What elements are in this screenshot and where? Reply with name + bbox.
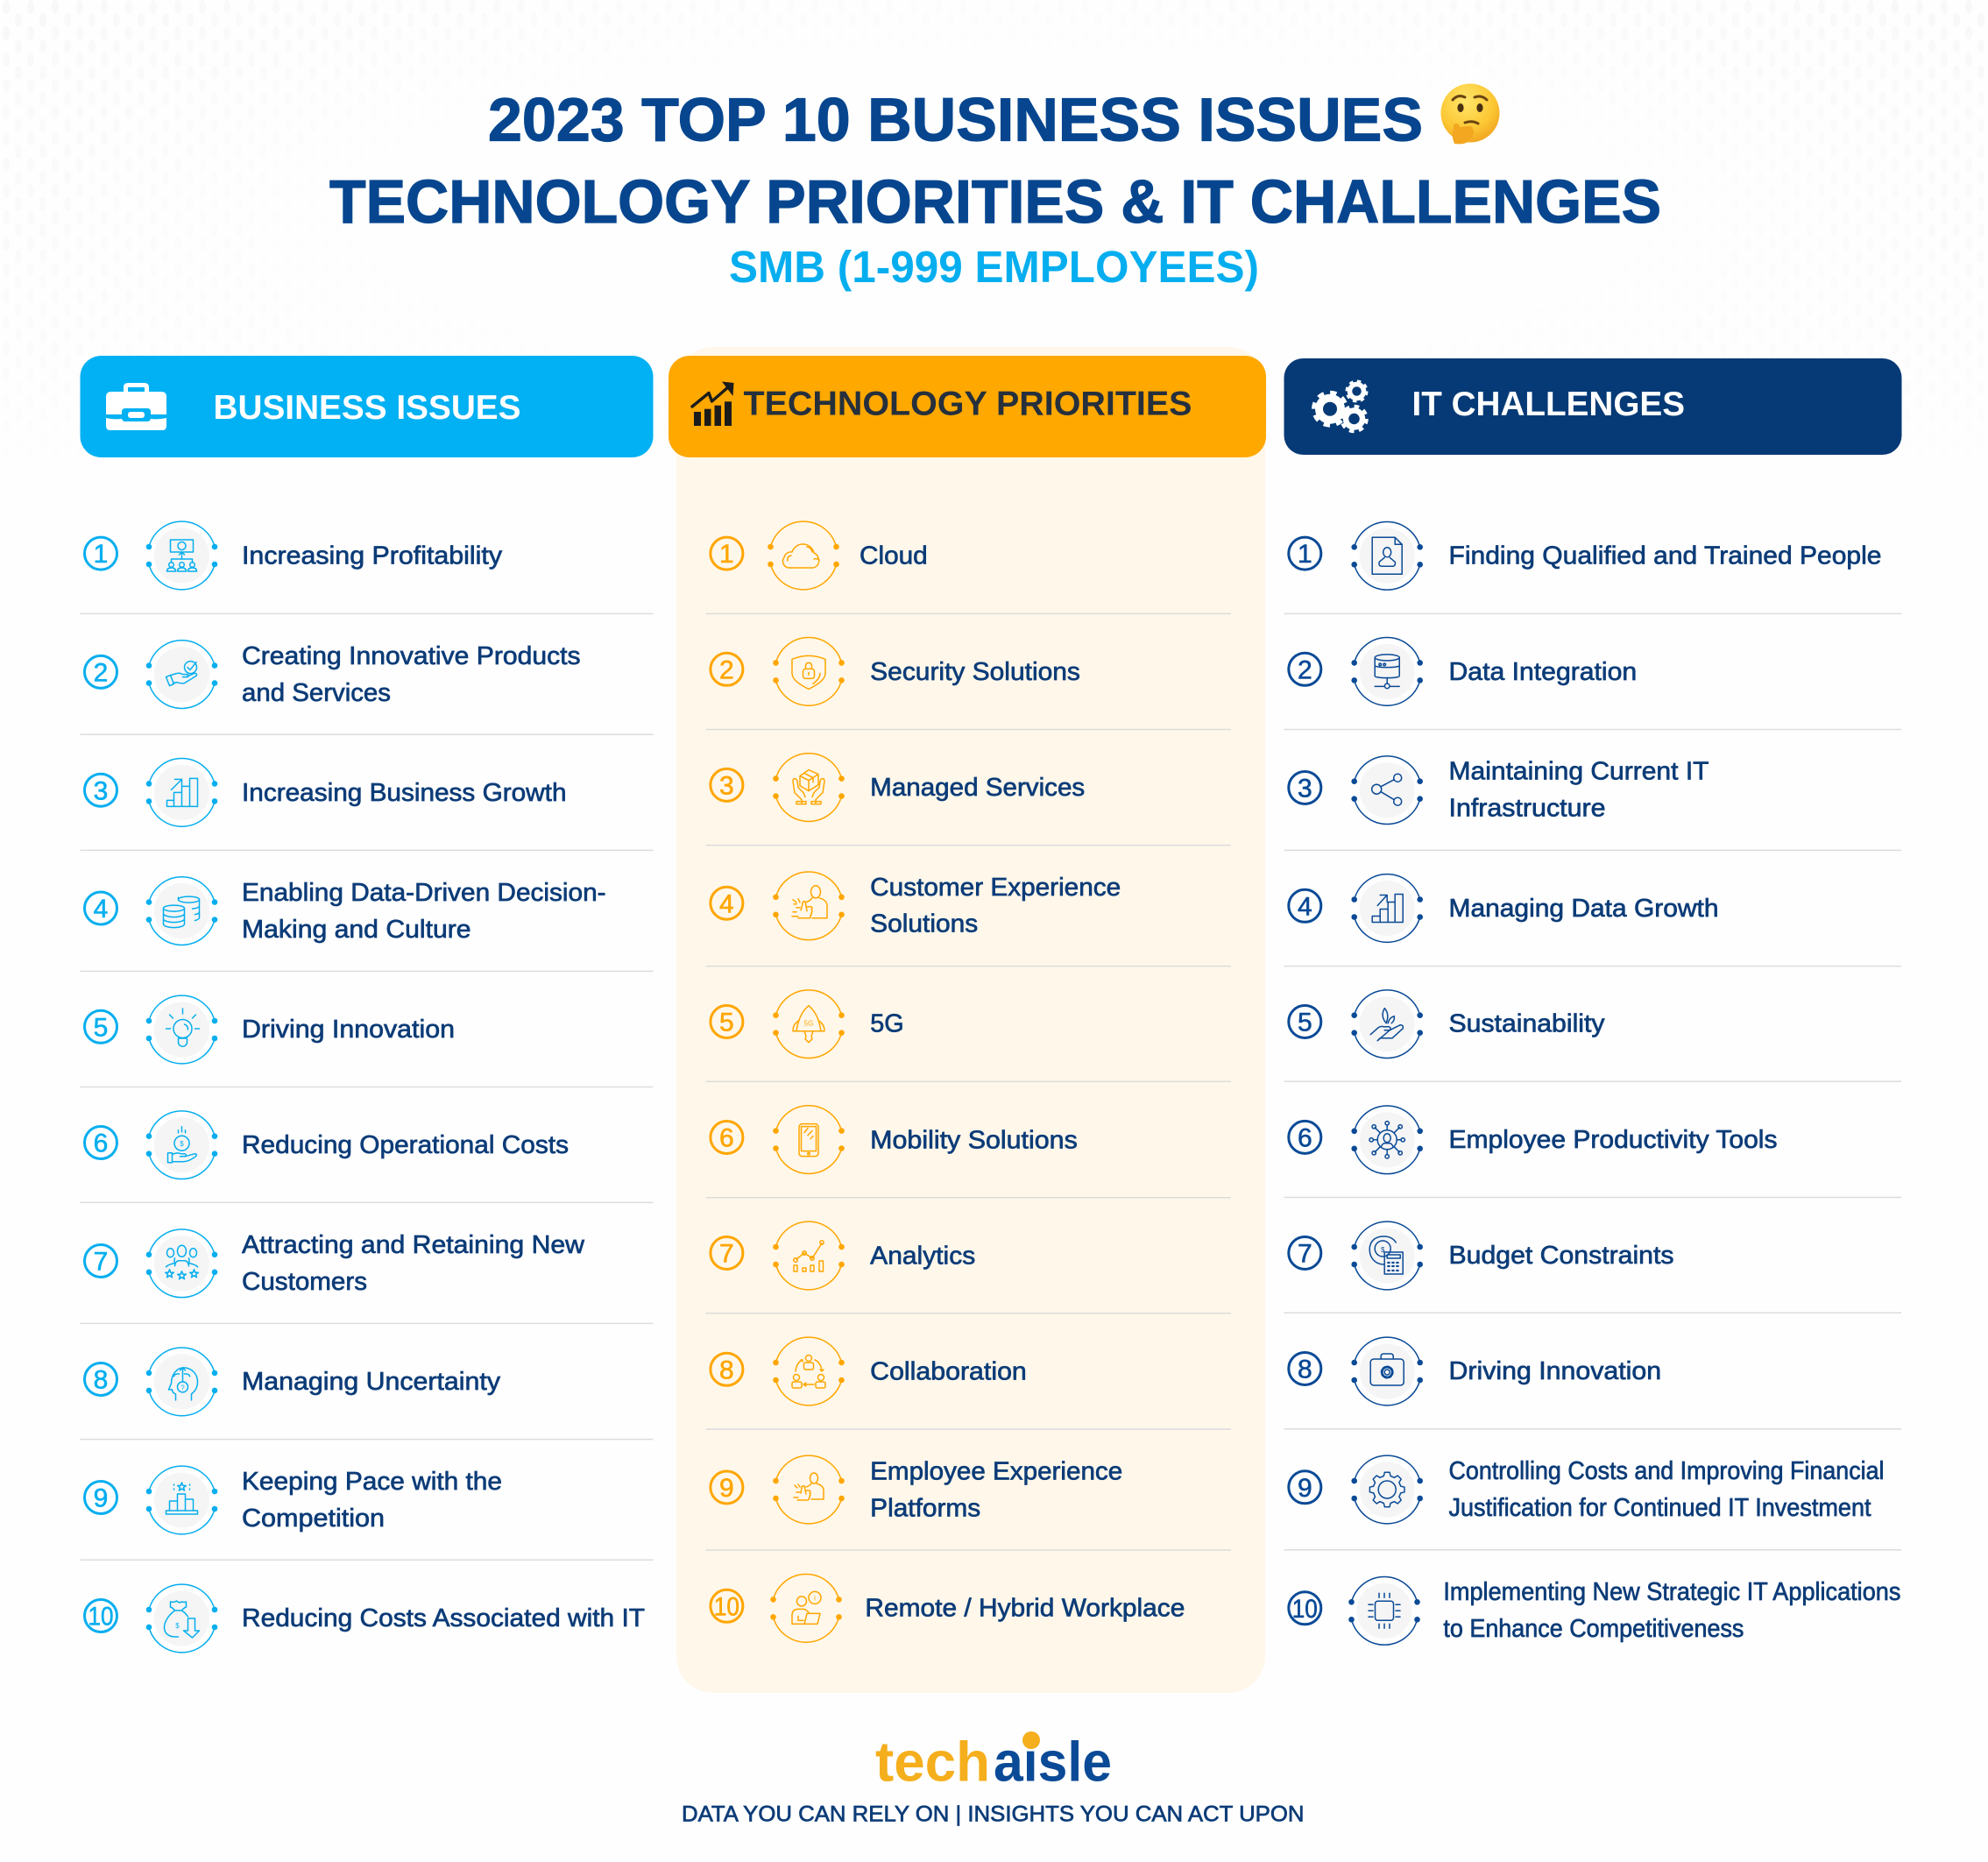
label line 2: Solutions (870, 910, 978, 938)
panel: technology priorities background (676, 347, 1265, 1693)
icon: hand with coin: $ (180, 1140, 184, 1148)
number badge 4: 4 (719, 889, 734, 918)
item 5: sustainability (1289, 990, 1605, 1058)
icon: coin and calculator: $ (1381, 1246, 1385, 1254)
logo: techaisle wordmark (875, 1731, 1112, 1794)
tagline: DATA YOU CAN RELY ON | INSIGHTS YOU CAN ACT UPON (682, 1802, 1304, 1826)
icon: 5G rocket (773, 990, 845, 1058)
icon: rising bar chart (692, 382, 734, 426)
label line 2: Making and Culture (242, 916, 471, 944)
number badge 9: 9 (1298, 1474, 1312, 1503)
icon: data stacks (146, 877, 217, 945)
item 2: security solutions (711, 638, 1080, 705)
logo: techaisle wordmark: tech (875, 1731, 990, 1794)
item 5: driving innovation (84, 995, 455, 1064)
number badge 2 (711, 653, 743, 685)
number badge 5 (711, 1006, 743, 1037)
label line 2: and Services (242, 679, 391, 707)
icon: hand with check (146, 641, 217, 708)
number badge 5 (1289, 1006, 1321, 1037)
number badge 7 (1289, 1237, 1321, 1269)
icon: thinking face emoji (1440, 84, 1500, 144)
item 3: managed services (711, 754, 1085, 821)
icon: podium with star (146, 1466, 217, 1534)
icon: microchip (1348, 1576, 1420, 1645)
number badge 3: 3 (94, 776, 108, 805)
number badge 10: 10 (1292, 1595, 1318, 1624)
label: 5G (870, 1010, 904, 1038)
icon: gears (1314, 382, 1367, 431)
label: Managing Uncertainty (242, 1368, 501, 1396)
item 9: employee experience (711, 1455, 1122, 1524)
icon: money bag with down arrow: $ (175, 1622, 180, 1630)
item 5: 5G (711, 990, 904, 1058)
item 4: customer experience (711, 872, 1121, 940)
number badge 8 (1289, 1353, 1321, 1384)
number badge 2 (1289, 653, 1321, 685)
number badge 4 (1289, 889, 1321, 922)
label line 2: Justification for Continued IT Investment (1449, 1494, 1871, 1522)
label: Employee Experience (870, 1458, 1122, 1486)
column: IT challenges (1284, 521, 1901, 1645)
item 7: analytics (711, 1221, 975, 1290)
number badge 2: 2 (1298, 655, 1312, 684)
number badge 9: 9 (94, 1484, 108, 1513)
icon: remote worker: i (814, 1594, 816, 1602)
title block (329, 84, 1661, 292)
item 8: managing uncertainty (84, 1348, 501, 1416)
label: Collaboration (870, 1358, 1027, 1386)
icon: analytics chart (773, 1221, 845, 1290)
header: IT challenges (1284, 358, 1901, 455)
header: technology priorities (669, 356, 1266, 457)
number badge 8: 8 (1298, 1356, 1312, 1384)
icon: head with question (146, 1348, 217, 1416)
icon: hand with plant (1351, 990, 1423, 1058)
number badge 5: 5 (1298, 1009, 1312, 1037)
icon: hand with coin (146, 1111, 217, 1179)
item 7: attracting customers (84, 1229, 585, 1298)
number badge 3: 3 (719, 771, 734, 801)
column: technology priorities (706, 521, 1231, 1642)
icon: case with gear (1351, 1337, 1423, 1405)
footer: logo and tagline (682, 1731, 1304, 1826)
icon: shield with lock (773, 638, 845, 705)
label line 2: Infrastructure (1449, 795, 1605, 823)
number badge 7 (711, 1237, 743, 1269)
icon: growth bars (146, 759, 217, 826)
number badge 3: 3 (1298, 775, 1312, 804)
item 4: data-driven decision making (84, 877, 606, 945)
number badge 6: 6 (1298, 1123, 1312, 1153)
number badge 7 (84, 1244, 117, 1278)
label: Security Solutions (870, 658, 1080, 686)
number badge 1 (1289, 537, 1321, 570)
item 6: reducing operational costs (84, 1111, 569, 1179)
item 6: employee productivity tools (1289, 1106, 1777, 1174)
label: Driving Innovation (1449, 1357, 1661, 1385)
number badge 10: 10 (714, 1592, 739, 1621)
label: Enabling Data-Driven Decision- (242, 879, 606, 907)
icon: employee hub (1351, 1106, 1423, 1174)
label: Reducing Operational Costs (242, 1131, 569, 1159)
number badge 10: 10 (88, 1603, 114, 1632)
number badge 7: 7 (94, 1248, 108, 1277)
icon: money bag with down arrow (146, 1584, 217, 1653)
label: Finding Qualified and Trained People (1449, 542, 1882, 570)
label: Mobility Solutions (870, 1126, 1078, 1154)
label line 2: to Enhance Competitiveness (1443, 1615, 1744, 1643)
header label: BUSINESS ISSUES (214, 389, 520, 427)
label: Sustainability (1449, 1010, 1605, 1038)
number badge 2: 2 (94, 659, 108, 687)
label: Driving Innovation (242, 1016, 455, 1044)
item 1: qualified people (1289, 521, 1882, 590)
icon: profit and people (146, 521, 217, 590)
icon: thumbs up employee (773, 1455, 845, 1524)
number badge 4: 4 (1298, 892, 1312, 921)
number badge 6 (1289, 1121, 1321, 1153)
item 3: increasing business growth (84, 759, 566, 826)
icon: gear outline (1351, 1455, 1423, 1524)
number badge 1: 1 (719, 540, 734, 569)
number badge 6: 6 (719, 1124, 734, 1153)
label: Data Integration (1449, 658, 1637, 686)
label: Creating Innovative Products (242, 642, 581, 670)
label: Increasing Business Growth (242, 779, 566, 807)
icon: people and stars (146, 1229, 217, 1298)
item 8: driving innovation (1289, 1337, 1661, 1405)
number badge 8: 8 (719, 1356, 734, 1384)
number badge 8 (711, 1353, 743, 1385)
item 7: budget constraints (1289, 1221, 1673, 1290)
number badge 4 (84, 892, 117, 924)
icon: resume document (1351, 521, 1423, 590)
icon: collaboration people (773, 1337, 845, 1405)
number badge 9 (1289, 1471, 1321, 1504)
number badge 5 (84, 1010, 117, 1043)
number badge 7: 7 (1298, 1240, 1312, 1269)
icon: thumbs up person (773, 872, 845, 940)
icon: briefcase (106, 383, 166, 430)
number badge 1 (711, 537, 743, 570)
icon: smartphone (773, 1106, 845, 1173)
label line 2: Customers (242, 1268, 367, 1296)
number badge 1: 1 (94, 540, 108, 569)
icon: share nodes (1351, 756, 1423, 825)
label: Budget Constraints (1449, 1242, 1673, 1270)
item 8: collaboration (711, 1337, 1027, 1405)
number badge 9: 9 (719, 1474, 734, 1503)
subtitle: SMB (1-999 EMPLOYEES) (729, 242, 1259, 292)
label: Managed Services (870, 774, 1085, 802)
column: business issues (81, 521, 654, 1653)
label: Customer Experience (870, 874, 1121, 902)
number badge 1 (84, 537, 117, 570)
label: Increasing Profitability (242, 542, 503, 570)
label: Attracting and Retaining New (242, 1231, 585, 1259)
label: Reducing Costs Associated with IT (242, 1604, 645, 1632)
icon: coin and calculator (1351, 1221, 1423, 1290)
label: Maintaining Current IT (1449, 758, 1709, 786)
item 2: data integration (1289, 638, 1637, 705)
number badge 6 (711, 1122, 743, 1153)
icon: light bulb (146, 995, 217, 1064)
number badge 1: 1 (1298, 540, 1312, 569)
item 9: keeping pace with competition (84, 1466, 502, 1534)
logo: techaisle wordmark: aisle (994, 1731, 1112, 1794)
label line 2: Competition (242, 1504, 385, 1533)
item 10: strategic IT applications (1289, 1576, 1900, 1645)
number badge 8: 8 (94, 1366, 108, 1395)
number badge 3 (711, 768, 743, 801)
icon: hands holding box (773, 754, 845, 821)
number badge 2: 2 (719, 655, 734, 684)
number badge 5: 5 (94, 1013, 108, 1042)
header: business issues (81, 356, 654, 457)
icon: head with question: ? (180, 1384, 185, 1391)
label: Analytics (870, 1243, 975, 1271)
label: Employee Productivity Tools (1449, 1126, 1777, 1154)
icon: cloud (768, 521, 839, 590)
number badge 9 (84, 1481, 117, 1514)
number badge 6: 6 (94, 1129, 108, 1158)
number badge 3 (1289, 771, 1321, 804)
number badge 8 (84, 1363, 117, 1395)
label: Remote / Hybrid Workplace (865, 1594, 1185, 1622)
item 1: increasing profitability (84, 521, 503, 590)
number badge 4: 4 (94, 895, 108, 924)
number badge 5: 5 (719, 1009, 734, 1037)
icon: remote worker (770, 1575, 842, 1642)
title line 1: 2023 TOP 10 BUSINESS ISSUES (488, 86, 1423, 154)
label: Controlling Costs and Improving Financial (1449, 1457, 1884, 1485)
number badge 9 (711, 1471, 743, 1504)
icon: growth bars (1351, 874, 1423, 942)
item 10: reducing IT costs (84, 1584, 645, 1653)
item 10: remote workplace (711, 1575, 1185, 1642)
item 3: maintaining infrastructure (1289, 756, 1709, 825)
number badge 4 (711, 887, 743, 919)
item 1: cloud (711, 521, 928, 590)
label: Cloud (860, 542, 928, 570)
icon: networked database (1351, 638, 1423, 705)
header label: TECHNOLOGY PRIORITIES (743, 386, 1192, 422)
number badge 7: 7 (719, 1240, 734, 1269)
item 2: creating innovative products (84, 641, 581, 708)
label: Managing Data Growth (1449, 895, 1719, 923)
item 6: mobility solutions (711, 1106, 1078, 1173)
background: faint dot pattern (0, 0, 1988, 499)
icon: 5G rocket: 5G (804, 1020, 813, 1028)
number badge 6 (84, 1127, 117, 1158)
item 4: managing data growth (1289, 874, 1719, 942)
label line 2: Platforms (870, 1495, 980, 1523)
label: Keeping Pace with the (242, 1468, 502, 1496)
label: Implementing New Strategic IT Applications (1443, 1578, 1900, 1606)
number badge 2 (84, 655, 117, 688)
header label: IT CHALLENGES (1412, 386, 1685, 423)
item 9: controlling costs (1289, 1455, 1884, 1524)
number badge 3 (84, 774, 117, 806)
title line 2: TECHNOLOGY PRIORITIES & IT CHALLENGES (329, 167, 1661, 236)
